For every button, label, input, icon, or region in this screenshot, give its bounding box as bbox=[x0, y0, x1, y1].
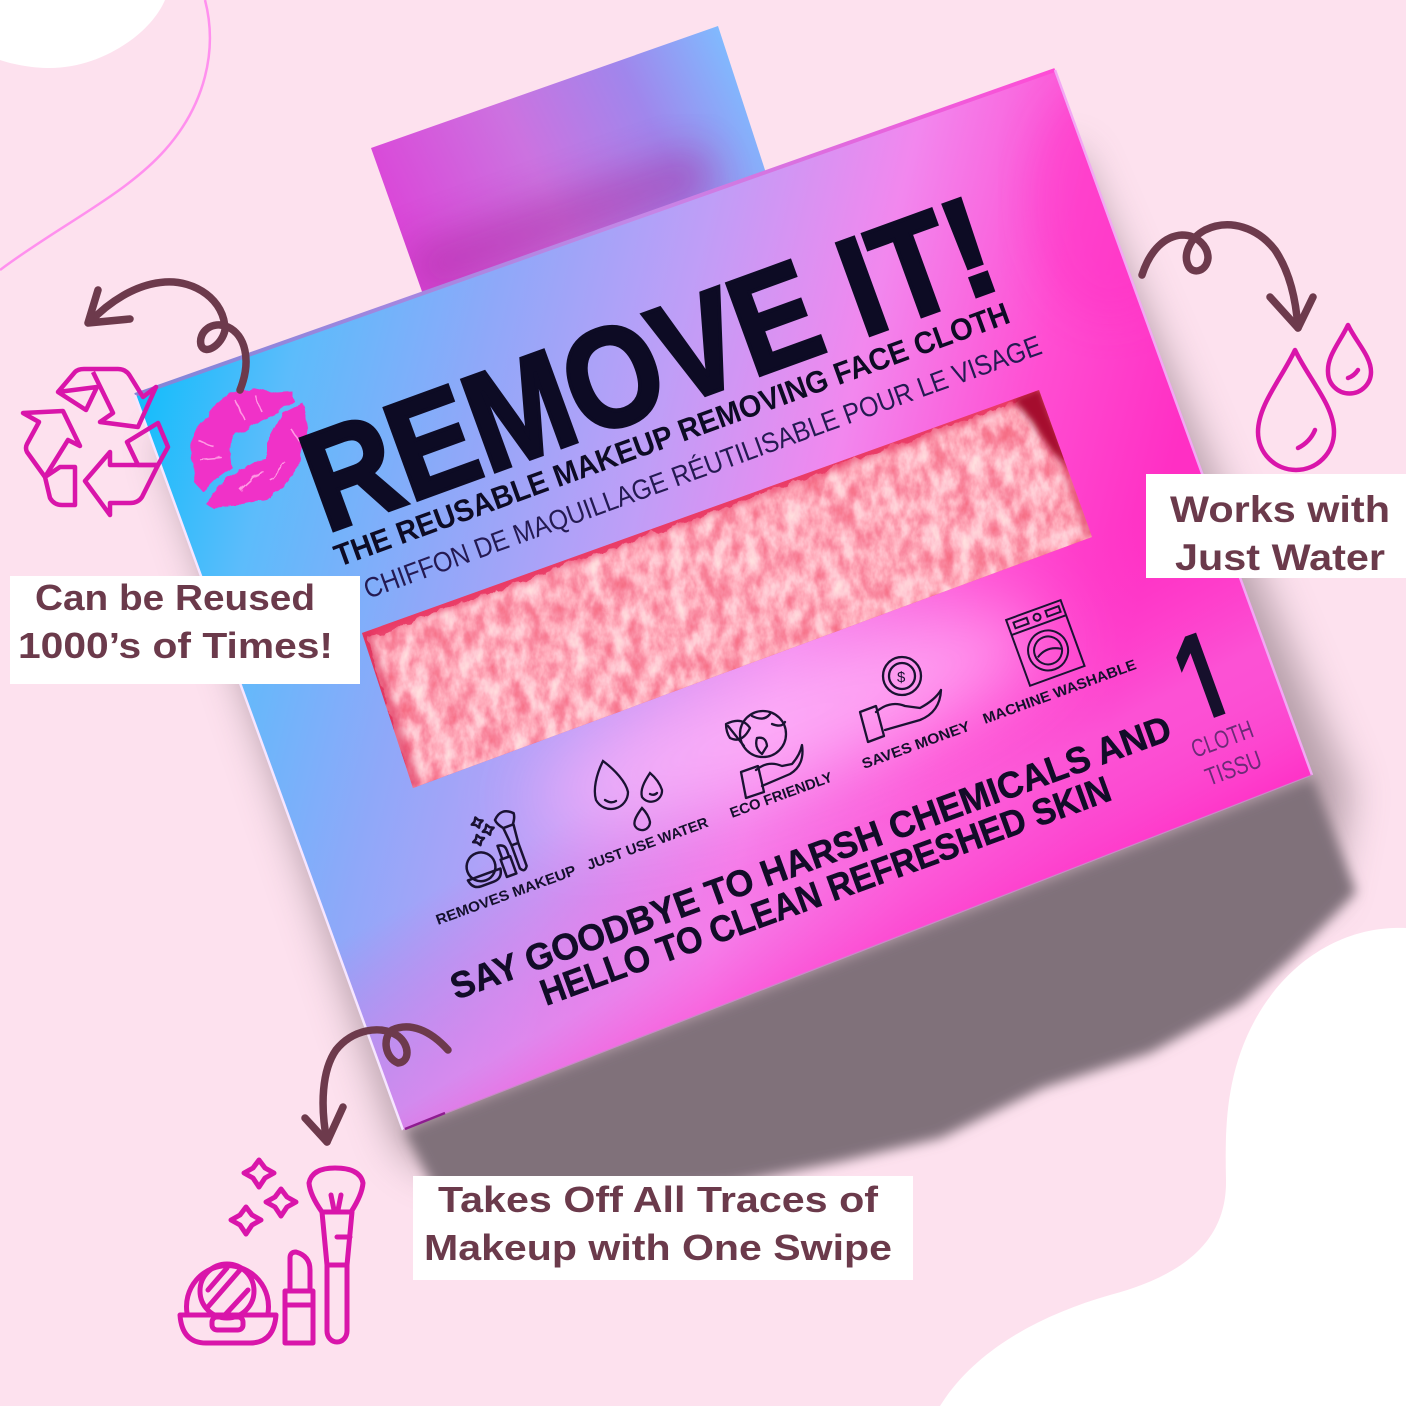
box front gradient bbox=[135, 70, 1312, 1130]
arrow: to recycle icon bbox=[88, 282, 246, 390]
callout: reuse bbox=[10, 576, 360, 684]
box icon: eco friendly bbox=[726, 711, 802, 798]
box title: REMOVE IT! bbox=[282, 166, 1015, 561]
box edges bbox=[135, 70, 1312, 1130]
box slogan: HELLO TO CLEAN REFRESHED SKIN bbox=[535, 768, 1116, 1014]
arrow: to makeup icon bbox=[305, 1027, 448, 1142]
box count: 1 cloth: 1 bbox=[1154, 597, 1258, 772]
cloth window bbox=[362, 388, 1096, 792]
icon: water drops bbox=[1258, 325, 1371, 470]
box shadow bbox=[160, 150, 1356, 1198]
box slogan: SAY GOODBYE TO HARSH CHEMICALS AND bbox=[445, 708, 1177, 1008]
cloth backing bbox=[362, 390, 1092, 788]
product box bbox=[135, 70, 1312, 1130]
box gradient: bottom magenta band and highlight bbox=[346, 100, 1306, 1129]
box label: saves money: SAVES MONEY bbox=[860, 719, 973, 773]
box icon: water drops bbox=[595, 761, 662, 830]
icon: makeup bbox=[180, 1160, 363, 1343]
icon: recycle bbox=[23, 369, 168, 515]
box icon: saves money: $ bbox=[897, 669, 906, 686]
callout: makeup: Takes Off All Traces of bbox=[438, 1179, 879, 1220]
callout: reuse: Can be Reused bbox=[35, 577, 315, 618]
callout: makeup bbox=[413, 1176, 913, 1280]
box label: just use water: JUST USE WATER bbox=[585, 815, 711, 874]
box subtitle french: CHIFFON DE MAQUILLAGE RÉUTILISABLE POUR LE VISAGE bbox=[359, 330, 1046, 605]
box label: machine washable: MACHINE WASHABLE bbox=[981, 657, 1139, 728]
callout: water: Works with bbox=[1170, 489, 1390, 530]
pink curve: top left bbox=[0, 0, 210, 270]
callout: water: Just Water bbox=[1175, 537, 1385, 578]
callout: reuse: 1000’s of Times! bbox=[18, 625, 333, 666]
box icon: removes makeup bbox=[449, 805, 533, 890]
box count: 1 cloth bbox=[1176, 632, 1260, 784]
box label: removes makeup: REMOVES MAKEUP bbox=[434, 863, 579, 929]
box count: 1 cloth: TISSU bbox=[1201, 745, 1266, 792]
pink fluffy cloth bbox=[362, 388, 1096, 792]
back flap of box bbox=[371, 26, 770, 300]
arrow: to water drops bbox=[1142, 225, 1313, 328]
box subtitle english: THE REUSABLE MAKEUP REMOVING FACE CLOTH bbox=[329, 296, 1014, 574]
brand lips logo bbox=[190, 388, 307, 508]
callout: water bbox=[1146, 474, 1406, 578]
box icon: saves money bbox=[860, 657, 941, 742]
box count: 1 cloth: CLOTH bbox=[1187, 715, 1257, 764]
box label: eco friendly: ECO FRIENDLY bbox=[728, 770, 835, 822]
callout: makeup: Makeup with One Swipe bbox=[424, 1227, 892, 1268]
white blob: bottom right bbox=[940, 928, 1406, 1406]
white blob: top left bbox=[0, 0, 165, 68]
box icon: machine washable bbox=[1006, 600, 1085, 686]
